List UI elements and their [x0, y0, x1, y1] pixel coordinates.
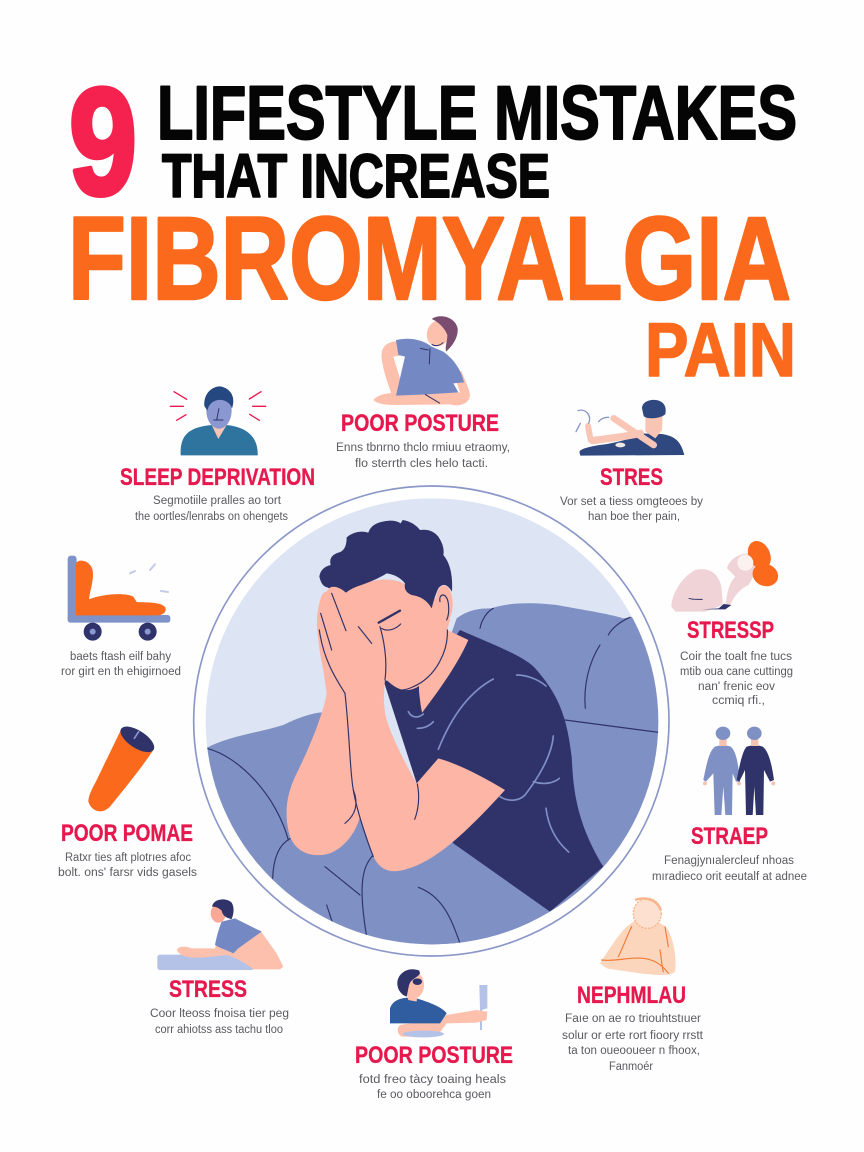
hands and arms — [287, 587, 505, 871]
heading: STRES — [600, 464, 663, 491]
heading: POOR POMAE — [61, 820, 193, 847]
item: stress left — [150, 899, 289, 1036]
item: sleep deprivation — [120, 386, 315, 523]
central illustration: man covering face on sofa — [194, 486, 669, 956]
description — [562, 1013, 704, 1073]
icon: curled figure with orange hair — [671, 537, 781, 612]
description — [652, 855, 807, 883]
description — [560, 496, 703, 523]
title numeral 9: 9 — [69, 57, 137, 227]
icon: orange foam roller — [88, 722, 158, 811]
description — [680, 651, 793, 707]
item: poor pomae — [58, 722, 197, 879]
title line: that increase: THAT INCREASE — [162, 142, 550, 210]
icon: man in sunglasses holding tube — [390, 969, 487, 1037]
icon: man leaning on arm — [373, 316, 470, 405]
circle background — [206, 498, 658, 944]
icon: orange seat on wheeled cart — [68, 556, 170, 641]
description — [61, 651, 181, 678]
title line: pain: PAIN — [645, 308, 796, 393]
description: ta ton oueooueer n fhoox, — [568, 1045, 700, 1057]
ear — [435, 585, 453, 623]
item: nephmlau — [562, 898, 704, 1073]
description: han boe ther pain, — [588, 511, 680, 523]
outer ring — [194, 486, 669, 956]
description — [359, 1074, 506, 1101]
description: Coir the toalt fne tucs — [680, 651, 792, 663]
description: Vor set a tiess omgteoes by — [560, 496, 703, 508]
description: the oortles/lenrabs on ohengets — [135, 511, 288, 523]
heading: NEPHMLAU — [577, 982, 686, 1009]
item: cart / poor support — [61, 556, 181, 678]
description: Fenagjynıalercleuf nhoas — [664, 855, 794, 867]
heading: STRESS — [169, 976, 247, 1003]
description: Coor lteoss fnoisa tier peg — [150, 1008, 289, 1020]
shirt — [383, 630, 603, 912]
description: fe oo oboorehca goen — [377, 1089, 491, 1101]
heading: STRESSP — [687, 617, 774, 644]
sofa and man — [200, 520, 667, 947]
icon: man with raised arm — [576, 400, 684, 456]
icon: tired man with red rays — [170, 386, 266, 455]
item: poor posture top — [336, 316, 510, 470]
description: flo sterrth cles helo tacti. — [355, 458, 488, 470]
hair — [319, 520, 452, 608]
description: nan' frenic eov — [698, 681, 775, 693]
icon: line-art peach figure — [600, 898, 676, 975]
icon: two standing people — [703, 727, 775, 815]
description: Fanmoér — [609, 1061, 653, 1073]
description — [150, 1008, 289, 1036]
title — [68, 57, 797, 393]
description: ror girt en th ehigirnoed — [61, 666, 181, 678]
description: Faıe on ae ro triouhtstıuer — [565, 1013, 701, 1025]
description: Enns tbnrno thclo rmiuu etraomy, — [336, 442, 510, 454]
description: mtib oua cane cuttingg — [680, 666, 793, 678]
description: fotd freo tàcy toaing heals — [359, 1074, 506, 1086]
description: corr ahiotss ass tachu tloo — [155, 1024, 283, 1036]
item: stressp — [671, 537, 793, 707]
description — [135, 495, 288, 523]
description: mıradieco orit eeutalf at adnee — [652, 871, 807, 883]
description: solur or erte rort fioory rrstt — [562, 1030, 704, 1042]
description: bolt. ons' farsr vids gasels — [58, 867, 197, 879]
heading: POOR POSTURE — [355, 1042, 513, 1069]
description: Ratxr ties aft plotrıes afoc — [65, 852, 191, 864]
description: baets ftash eilf bahy — [70, 651, 171, 663]
heading: SLEEP DEPRIVATION — [120, 464, 315, 491]
heading: STRAEP — [691, 823, 768, 850]
eyebrow — [379, 611, 400, 623]
item: stres — [560, 400, 703, 523]
item: straep — [652, 727, 807, 883]
heading: POOR POSTURE — [341, 410, 499, 437]
description: ccmiq rfi., — [712, 695, 765, 707]
icon: man bending over mat — [157, 899, 283, 970]
description — [336, 442, 510, 470]
item: poor posture bottom — [355, 969, 513, 1101]
description: Segmotiile pralles ao tort — [153, 495, 282, 507]
face and neck — [340, 579, 468, 713]
description — [58, 852, 197, 879]
